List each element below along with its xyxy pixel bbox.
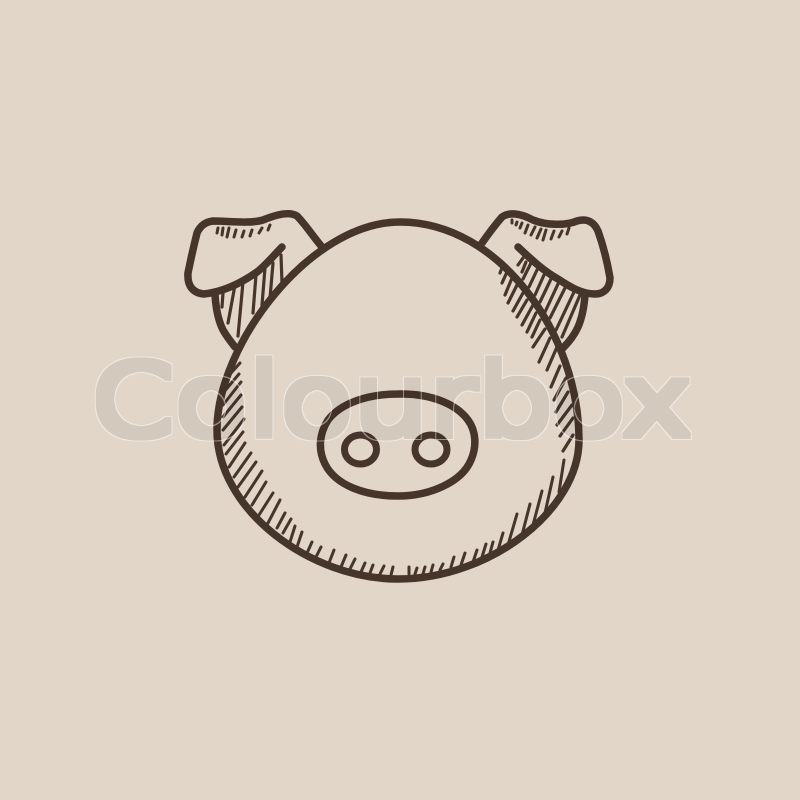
watermark text: Colourbox [92, 342, 692, 461]
icon: right ear [482, 214, 610, 348]
head shading: left and bottom hatching [223, 363, 564, 575]
icon: snout [320, 394, 475, 496]
icon: head outline [217, 222, 579, 579]
icon: left nostril [344, 435, 376, 464]
icon: left ear [188, 214, 322, 347]
icon: right nostril [415, 435, 447, 464]
head shading: right hatching [500, 265, 573, 451]
